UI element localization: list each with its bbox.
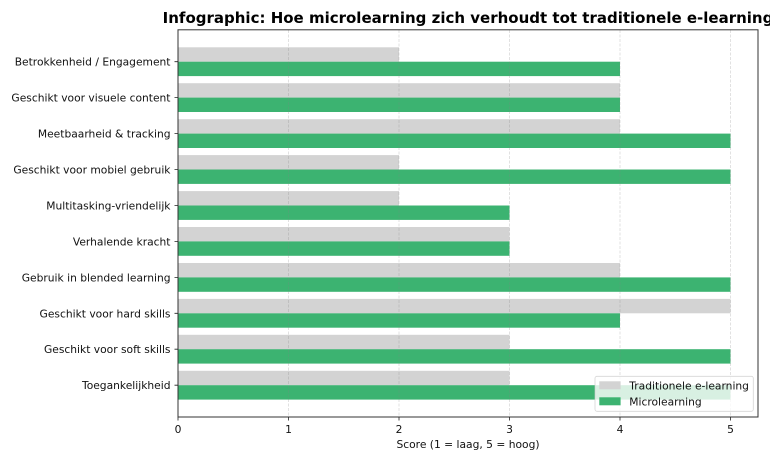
legend <box>595 376 753 411</box>
x axis tick labels: 1 <box>285 423 292 436</box>
category labels: Geschikt voor soft skills <box>44 343 171 356</box>
bars: microlearning <box>178 62 730 400</box>
x axis tick labels: 2 <box>396 423 402 436</box>
x axis tick labels: 0 <box>175 423 182 436</box>
x axis tick labels: 4 <box>617 423 624 436</box>
category labels: Geschikt voor mobiel gebruik <box>13 164 171 176</box>
legend item: microlearning: Microlearning <box>629 395 702 408</box>
legend item: traditionele e-learning: Traditionele e-learning <box>628 379 749 392</box>
plot frame <box>178 30 758 417</box>
x axis tick labels: 5 <box>727 423 734 436</box>
category labels: Geschikt voor hard skills <box>40 307 171 320</box>
category labels: Multitasking-vriendelijk <box>46 200 171 212</box>
title: Infographic: Hoe microlearning zich verhoudt tot traditionele e-learning <box>163 9 770 27</box>
category labels: Betrokkenheid / Engagement <box>15 56 170 69</box>
bars: traditionele e-learning <box>178 47 730 385</box>
category labels: Gebruik in blended learning <box>22 271 170 284</box>
category labels: Geschikt voor visuele content <box>11 92 170 105</box>
category labels: Toegankelijkheid <box>81 379 170 392</box>
category labels <box>11 56 171 392</box>
x axis tick labels: 3 <box>506 423 513 436</box>
category labels: Verhalende kracht <box>73 235 170 248</box>
category labels: Meetbaarheid & tracking <box>38 128 170 141</box>
x axis label: Score (1 = laag, 5 = hoog) <box>396 438 540 451</box>
x axis tick labels <box>175 423 734 436</box>
